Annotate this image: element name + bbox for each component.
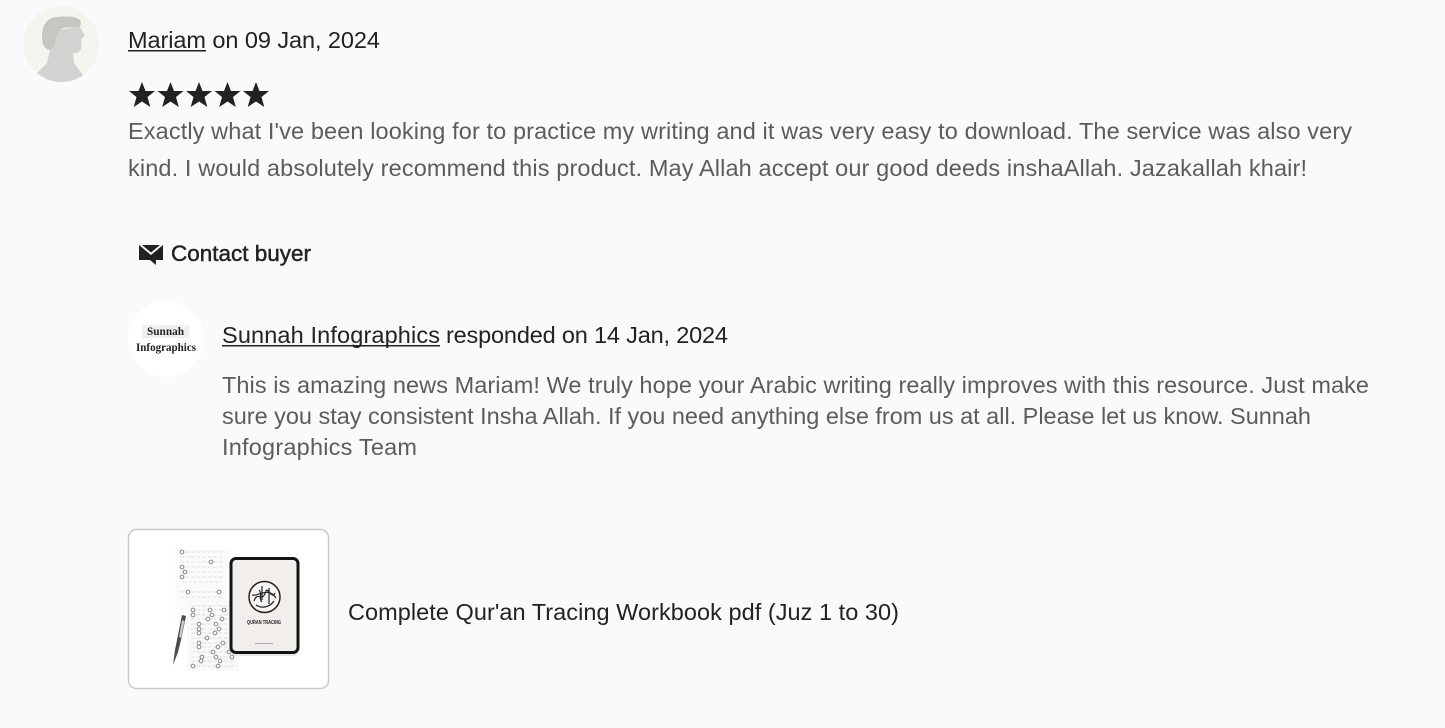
- buyer name underline: [128, 50, 206, 52]
- worksheet front page: [187, 598, 239, 671]
- buyer name and date: Mariam on 09 Jan, 2024: [128, 27, 380, 53]
- icon: buyer avatar: [24, 6, 100, 90]
- tablet shadow: [232, 648, 298, 656]
- panel: seller response: [128, 301, 1369, 460]
- worksheet tracing marks: [180, 550, 234, 668]
- panel: buyer review: [24, 6, 1352, 181]
- seller name and response date: [222, 322, 728, 348]
- icon: seller logo: [128, 301, 204, 377]
- response text: Infographics Team: [222, 434, 417, 460]
- icon: five star rating: [129, 82, 269, 107]
- tablet footer: [255, 643, 273, 644]
- icon: envelope message: [139, 245, 163, 265]
- product image: workbook and tablet: [173, 549, 298, 671]
- worksheet back text lines: [180, 552, 224, 597]
- icon: seller logo: Infographics: [136, 342, 196, 354]
- response text: This is amazing news Mariam! We truly hope your Arabic writing really improves with this resource. Just make: [222, 372, 1369, 398]
- emblem calligraphy: [252, 586, 276, 607]
- review text: kind. I would absolutely recommend this product. May Allah accept our good deeds inshaAllah. Jazakallah khair!: [128, 155, 1307, 181]
- tablet title: QURAN TRACING: [247, 620, 281, 626]
- review text: Exactly what I've been looking for to practice my writing and it was very easy to download. The service was also very: [128, 118, 1352, 144]
- seller name and response date: Sunnah Infographics: [222, 322, 440, 348]
- button: contact buyer: [139, 241, 312, 266]
- response text: [222, 372, 1369, 460]
- contact buyer label: Contact buyer: [171, 241, 312, 266]
- worksheet back page: [175, 549, 228, 621]
- worksheet front text lines: [191, 606, 235, 666]
- product card: [128, 530, 328, 688]
- seller name and response date: responded on 14 Jan, 2024: [446, 322, 728, 348]
- response text: sure you stay consistent Insha Allah. If you need anything else from us at all. Please let us know. Sunnah: [222, 403, 1311, 429]
- tablet emblem: [249, 582, 280, 612]
- pen: [173, 615, 186, 665]
- icon: seller logo: Sunnah: [147, 326, 185, 338]
- product title: Complete Qur'an Tracing Workbook pdf (Juz 1 to 30): [348, 599, 899, 625]
- review text: [128, 118, 1352, 181]
- panel: purchased product: [128, 530, 899, 688]
- tablet: [231, 558, 298, 652]
